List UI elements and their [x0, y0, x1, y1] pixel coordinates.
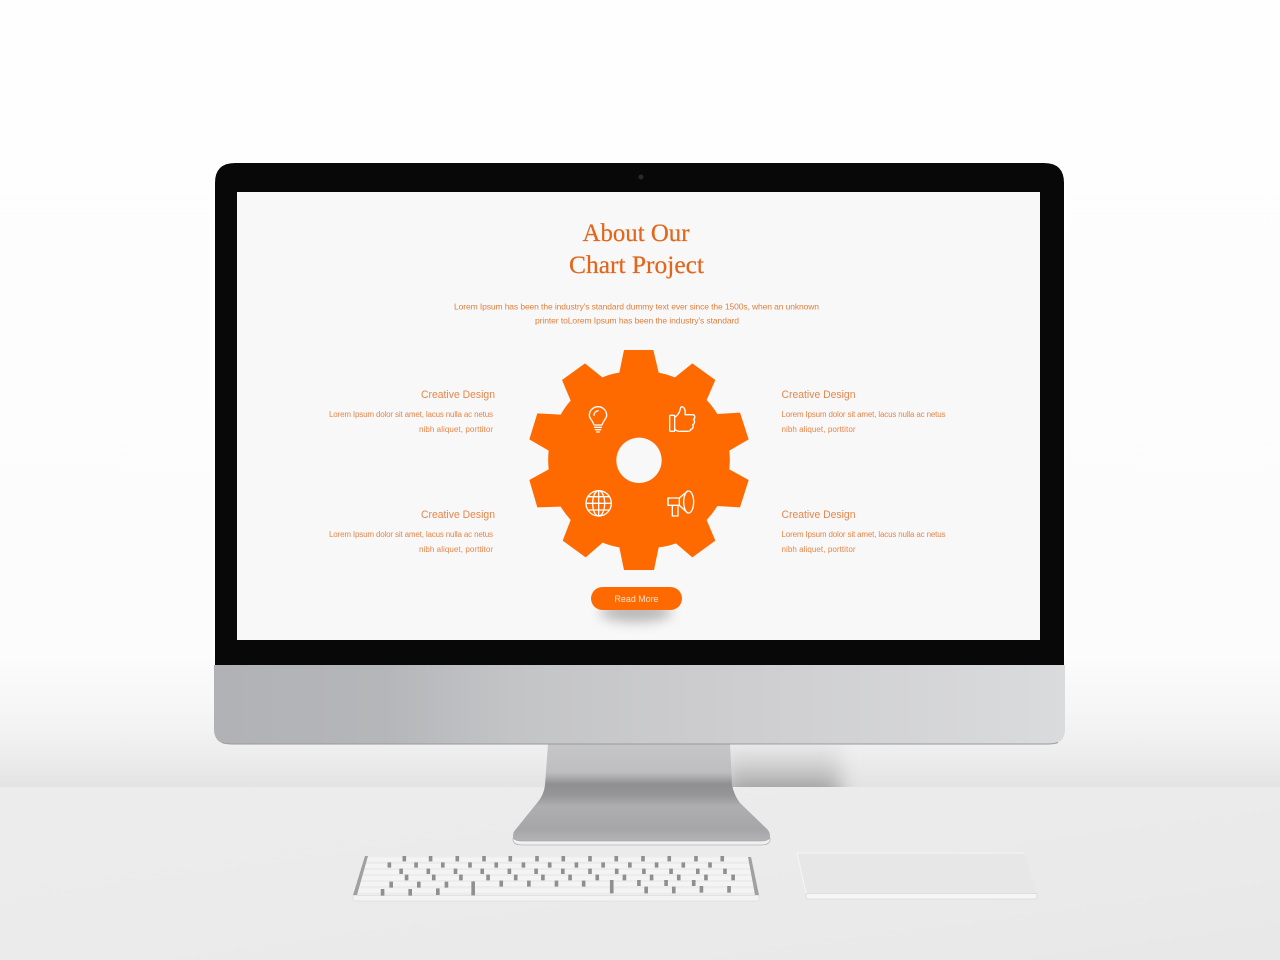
keyboard edge shadow	[353, 856, 759, 895]
intro text	[454, 302, 819, 326]
icon: megaphone	[668, 491, 694, 516]
text block: top right: Creative Design	[782, 389, 856, 401]
background: desk	[0, 787, 1280, 960]
keyboard key rows	[354, 860, 757, 890]
intro text: Lorem Ipsum has been the industry's standard dummy text ever since the 1500s, when an unknown	[454, 302, 819, 312]
icon: thumbs up	[670, 407, 695, 431]
icon: globe	[586, 491, 611, 516]
gear diagram	[529, 350, 749, 570]
text block: top right: Lorem Ipsum dolor sit amet, lacus nulla ac netus	[782, 410, 946, 419]
monitor rim	[213, 161, 1066, 671]
text block: top left: Lorem Ipsum dolor sit amet, lacus nulla ac netus	[329, 410, 493, 419]
keyboard body	[353, 856, 759, 901]
stand shadow on wall	[725, 745, 840, 788]
text block: top right: nibh aliquet, porttitor	[782, 425, 856, 434]
text block: bottom right: Creative Design	[782, 509, 856, 521]
text block: top left: Creative Design	[421, 389, 495, 401]
trackpad	[797, 853, 1037, 899]
text block: top left	[329, 389, 495, 434]
text block: bottom left: Creative Design	[421, 509, 495, 521]
chin lower edge	[222, 742, 1058, 744]
screen	[237, 192, 1040, 640]
keyboard keys	[383, 856, 733, 896]
read more button	[591, 587, 682, 610]
monitor chin	[214, 665, 1065, 744]
title	[569, 220, 704, 279]
webcam	[638, 174, 644, 180]
text block: bottom left: Lorem Ipsum dolor sit amet, lacus nulla ac netus	[329, 530, 493, 539]
keyboard	[353, 856, 759, 901]
text block: bottom left: nibh aliquet, porttitor	[419, 545, 493, 554]
monitor stand	[513, 744, 770, 845]
gear shape	[529, 350, 749, 570]
title: Chart Project	[569, 252, 704, 279]
monitor	[213, 161, 1066, 744]
icon: light bulb	[589, 407, 607, 432]
text block: bottom right: nibh aliquet, porttitor	[782, 545, 856, 554]
button shadow	[600, 602, 672, 622]
monitor bezel	[215, 163, 1064, 665]
intro text: printer toLorem Ipsum has been the industry's standard	[535, 316, 739, 326]
text block: bottom left	[329, 509, 495, 554]
text block: top left: nibh aliquet, porttitor	[419, 425, 493, 434]
keyboard front edge	[353, 896, 759, 901]
text block: bottom right	[782, 509, 946, 554]
text block: bottom right: Lorem Ipsum dolor sit amet, lacus nulla ac netus	[782, 530, 946, 539]
text block: top right	[782, 389, 946, 434]
read more button: Read More	[614, 594, 658, 604]
gear hole	[616, 438, 662, 483]
title: About Our	[582, 220, 690, 247]
